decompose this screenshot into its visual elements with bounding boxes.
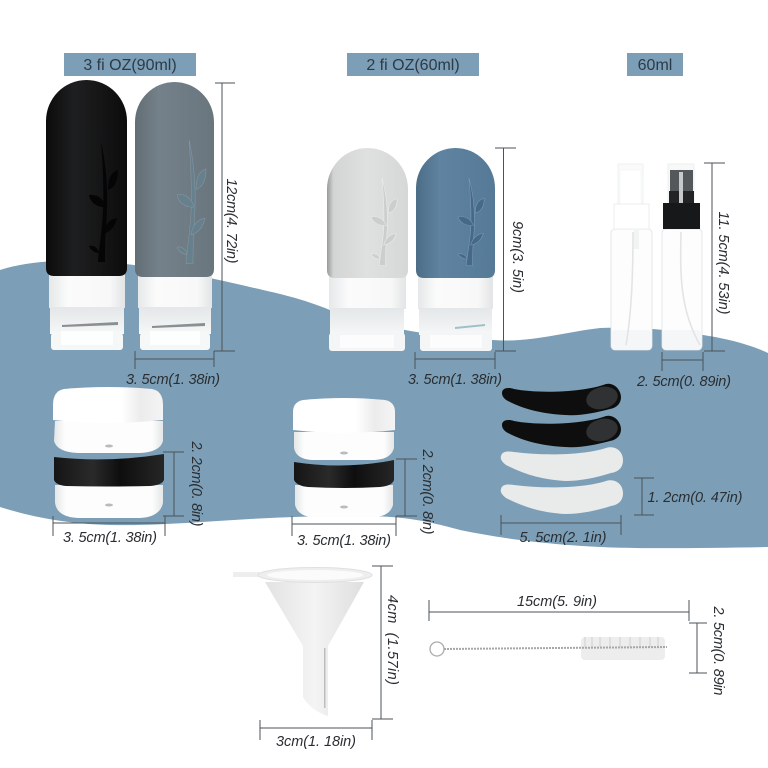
jar: black lid, middle bbox=[294, 460, 394, 517]
cleaning brush bbox=[430, 637, 667, 660]
dimension: 3.5cm bottle width 60ml: 3. 5cm(1. 38in) bbox=[408, 372, 502, 388]
header: 2 fl oz 60ml bbox=[347, 53, 479, 76]
bottle: light grey 60ml bbox=[327, 148, 408, 351]
dimension: 2.5cm spray width bbox=[636, 352, 731, 390]
dimension: 15cm brush length bbox=[429, 594, 689, 621]
header: 60ml: 60ml bbox=[638, 57, 672, 74]
dimension: 11.5cm height bbox=[704, 163, 731, 351]
background wave bbox=[0, 260, 768, 548]
dimension: 5.5cm spatula width bbox=[501, 515, 621, 546]
dimension: 15cm brush length: 15cm(5. 9in) bbox=[517, 594, 597, 610]
dimension: 1.2cm spatula height bbox=[634, 478, 742, 515]
spray bottle: white bbox=[611, 164, 652, 350]
dimension: 4cm funnel height bbox=[372, 566, 400, 719]
dimension: 4cm funnel height: 4cm (1.57in) bbox=[384, 595, 400, 685]
spray bottle: black bbox=[662, 164, 702, 350]
dimension: 2.5cm brush width bbox=[689, 606, 726, 696]
dimension: 2.5cm brush width: 2. 5cm(0. 89in bbox=[710, 606, 726, 696]
dimension: 3.5cm left jar width: 3. 5cm(1. 38in) bbox=[63, 530, 157, 546]
header: 3 fl oz 90ml bbox=[64, 53, 196, 76]
spatula: white 1 bbox=[501, 447, 623, 481]
header: 2 fl oz 60ml: 2 fi OZ(60ml) bbox=[366, 57, 460, 74]
header: 60ml bbox=[627, 53, 683, 76]
dimension: 1.2cm spatula height: 1. 2cm(0. 47in) bbox=[648, 490, 742, 506]
jar: white lid, middle bbox=[293, 398, 395, 460]
dimension: 2.2cm middle jar height bbox=[396, 448, 435, 534]
funnel bbox=[233, 568, 372, 716]
dimension: 3.5cm left jar width bbox=[53, 516, 165, 546]
spatula: white 2 bbox=[501, 480, 623, 514]
bottle: black 90ml bbox=[46, 80, 127, 350]
dimension: 3.5cm bottle width 90ml: 3. 5cm(1. 38in) bbox=[126, 372, 220, 388]
jar: white lid, left bbox=[53, 387, 163, 453]
dimension: 9cm height bbox=[495, 148, 525, 351]
dimension: 12cm height: 12cm(4. 72in) bbox=[223, 178, 239, 264]
dimension: 3.5cm middle jar width bbox=[292, 516, 396, 549]
dimension: 3.5cm bottle width 90ml bbox=[126, 351, 220, 388]
bottle: blue 60ml bbox=[416, 148, 495, 351]
dimension: 3.5cm middle jar width: 3. 5cm(1. 38in) bbox=[297, 533, 391, 549]
bottle: grey 90ml bbox=[135, 82, 214, 350]
dimension: 2.2cm left jar height: 2. 2cm(0. 8in) bbox=[188, 440, 204, 526]
dimension: 2.2cm middle jar height: 2. 2cm(0. 8in) bbox=[419, 448, 435, 534]
spatula: black 1 bbox=[502, 383, 621, 415]
dimension: 3cm funnel width bbox=[260, 720, 372, 750]
dimension: 11.5cm height: 11. 5cm(4. 53in) bbox=[715, 212, 731, 314]
dimension: 2.5cm spray width: 2. 5cm(0. 89in) bbox=[636, 374, 731, 390]
dimension: 9cm height: 9cm(3. 5in) bbox=[509, 221, 525, 293]
dimension: 2.2cm left jar height bbox=[163, 440, 204, 526]
header: 3 fl oz 90ml: 3 fi OZ(90ml) bbox=[83, 57, 177, 74]
dimension: 3.5cm bottle width 60ml bbox=[408, 352, 502, 388]
dimension: 12cm height bbox=[214, 83, 239, 351]
jar: black lid, left bbox=[54, 454, 164, 518]
spatula: black 2 bbox=[502, 415, 621, 447]
dimension: 5.5cm spatula width: 5. 5cm(2. 1in) bbox=[520, 530, 606, 546]
dimension: 3cm funnel width: 3cm(1. 18in) bbox=[276, 734, 356, 750]
